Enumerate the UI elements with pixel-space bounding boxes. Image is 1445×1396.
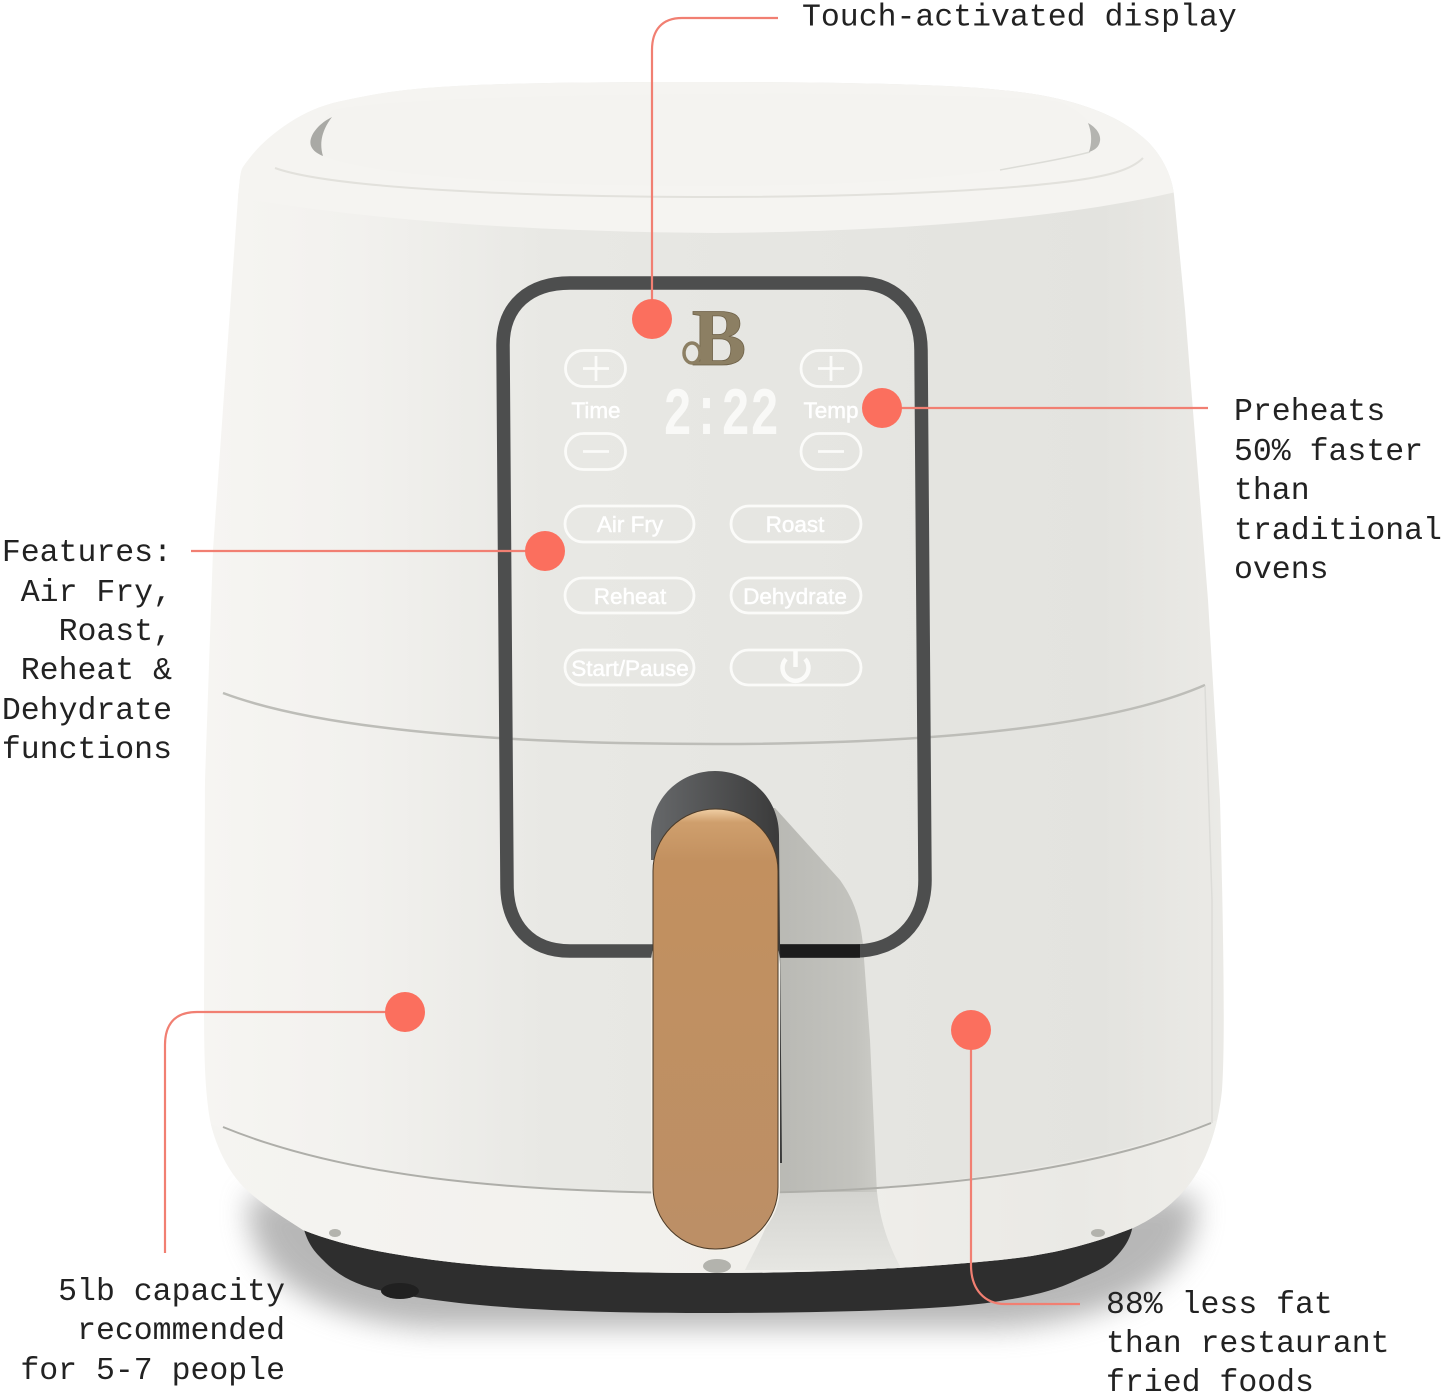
- ground shadow: [249, 1195, 1196, 1328]
- function buttons: Dehydrate: [743, 584, 847, 609]
- callout: preheats faster: [862, 388, 1442, 588]
- lower body band: [265, 1177, 1172, 1273]
- callout: features: Dehydrate: [2, 694, 172, 729]
- vent holes: [329, 1229, 1105, 1273]
- handle shadow upper: [770, 808, 877, 1194]
- digital time display: 2:22: [663, 378, 779, 455]
- temperature controls: [801, 350, 861, 470]
- handle cap: [651, 771, 782, 1163]
- lid top: [319, 94, 1093, 186]
- callout: features: functions: [2, 733, 172, 768]
- callout: features: Air Fry,: [21, 576, 172, 611]
- callout: capacity: 5lb capacity: [58, 1275, 285, 1310]
- lid collar: [455, 82, 1174, 233]
- callout: touch-activated display: [632, 0, 1237, 339]
- logo: B: B: [692, 292, 746, 383]
- callout: preheats faster: than: [1234, 474, 1310, 509]
- callout: preheats faster: 50% faster: [1234, 435, 1423, 470]
- dark base: [303, 1200, 1133, 1313]
- callout: features: [2, 531, 565, 768]
- basket side edge: [1205, 686, 1212, 1123]
- function buttons: Reheat: [594, 584, 667, 609]
- callout: touch-activated display: Touch-activated display: [802, 0, 1237, 36]
- callout: features: Reheat &: [21, 654, 172, 689]
- callout: less fat: 88% less fat: [1106, 1288, 1333, 1323]
- lid slot right: [1088, 123, 1100, 152]
- control panel frame: [503, 283, 925, 951]
- callout: capacity: [20, 992, 425, 1389]
- function buttons: Air Fry: [597, 512, 664, 537]
- callout: features: Features:: [2, 536, 172, 571]
- grip halo: [651, 900, 780, 1251]
- base foot: [381, 1283, 419, 1299]
- lower seam: [223, 1123, 1211, 1193]
- callout: capacity: for 5-7 people: [20, 1354, 285, 1389]
- handle: [651, 771, 782, 1251]
- icon: power: [783, 651, 809, 681]
- temperature controls: Temp: [803, 398, 859, 423]
- lid edge right: [1000, 152, 1090, 170]
- function buttons: Roast: [766, 512, 825, 537]
- time controls: [566, 350, 626, 470]
- air fryer product: [200, 60, 1230, 1328]
- callout: preheats faster: traditional: [1234, 514, 1442, 549]
- time controls: Time: [571, 398, 621, 423]
- callout: preheats faster: ovens: [1234, 553, 1329, 588]
- function buttons: [565, 506, 861, 685]
- main body: [204, 82, 1224, 1273]
- callout: less fat: [951, 1010, 1390, 1396]
- callout: features: Roast,: [59, 615, 172, 650]
- copper grip: [653, 809, 778, 1249]
- callout: capacity: recommended: [77, 1314, 285, 1349]
- frame shaded section: [778, 944, 860, 958]
- function buttons: Start/Pause: [571, 656, 689, 681]
- lid ledge line: [275, 158, 1143, 197]
- handle shadow lower: [745, 1192, 902, 1270]
- callout: preheats faster: Preheats: [1234, 395, 1385, 430]
- lid slot left: [310, 117, 332, 156]
- basket seam: [223, 685, 1205, 744]
- callout: less fat: than restaurant: [1106, 1327, 1390, 1362]
